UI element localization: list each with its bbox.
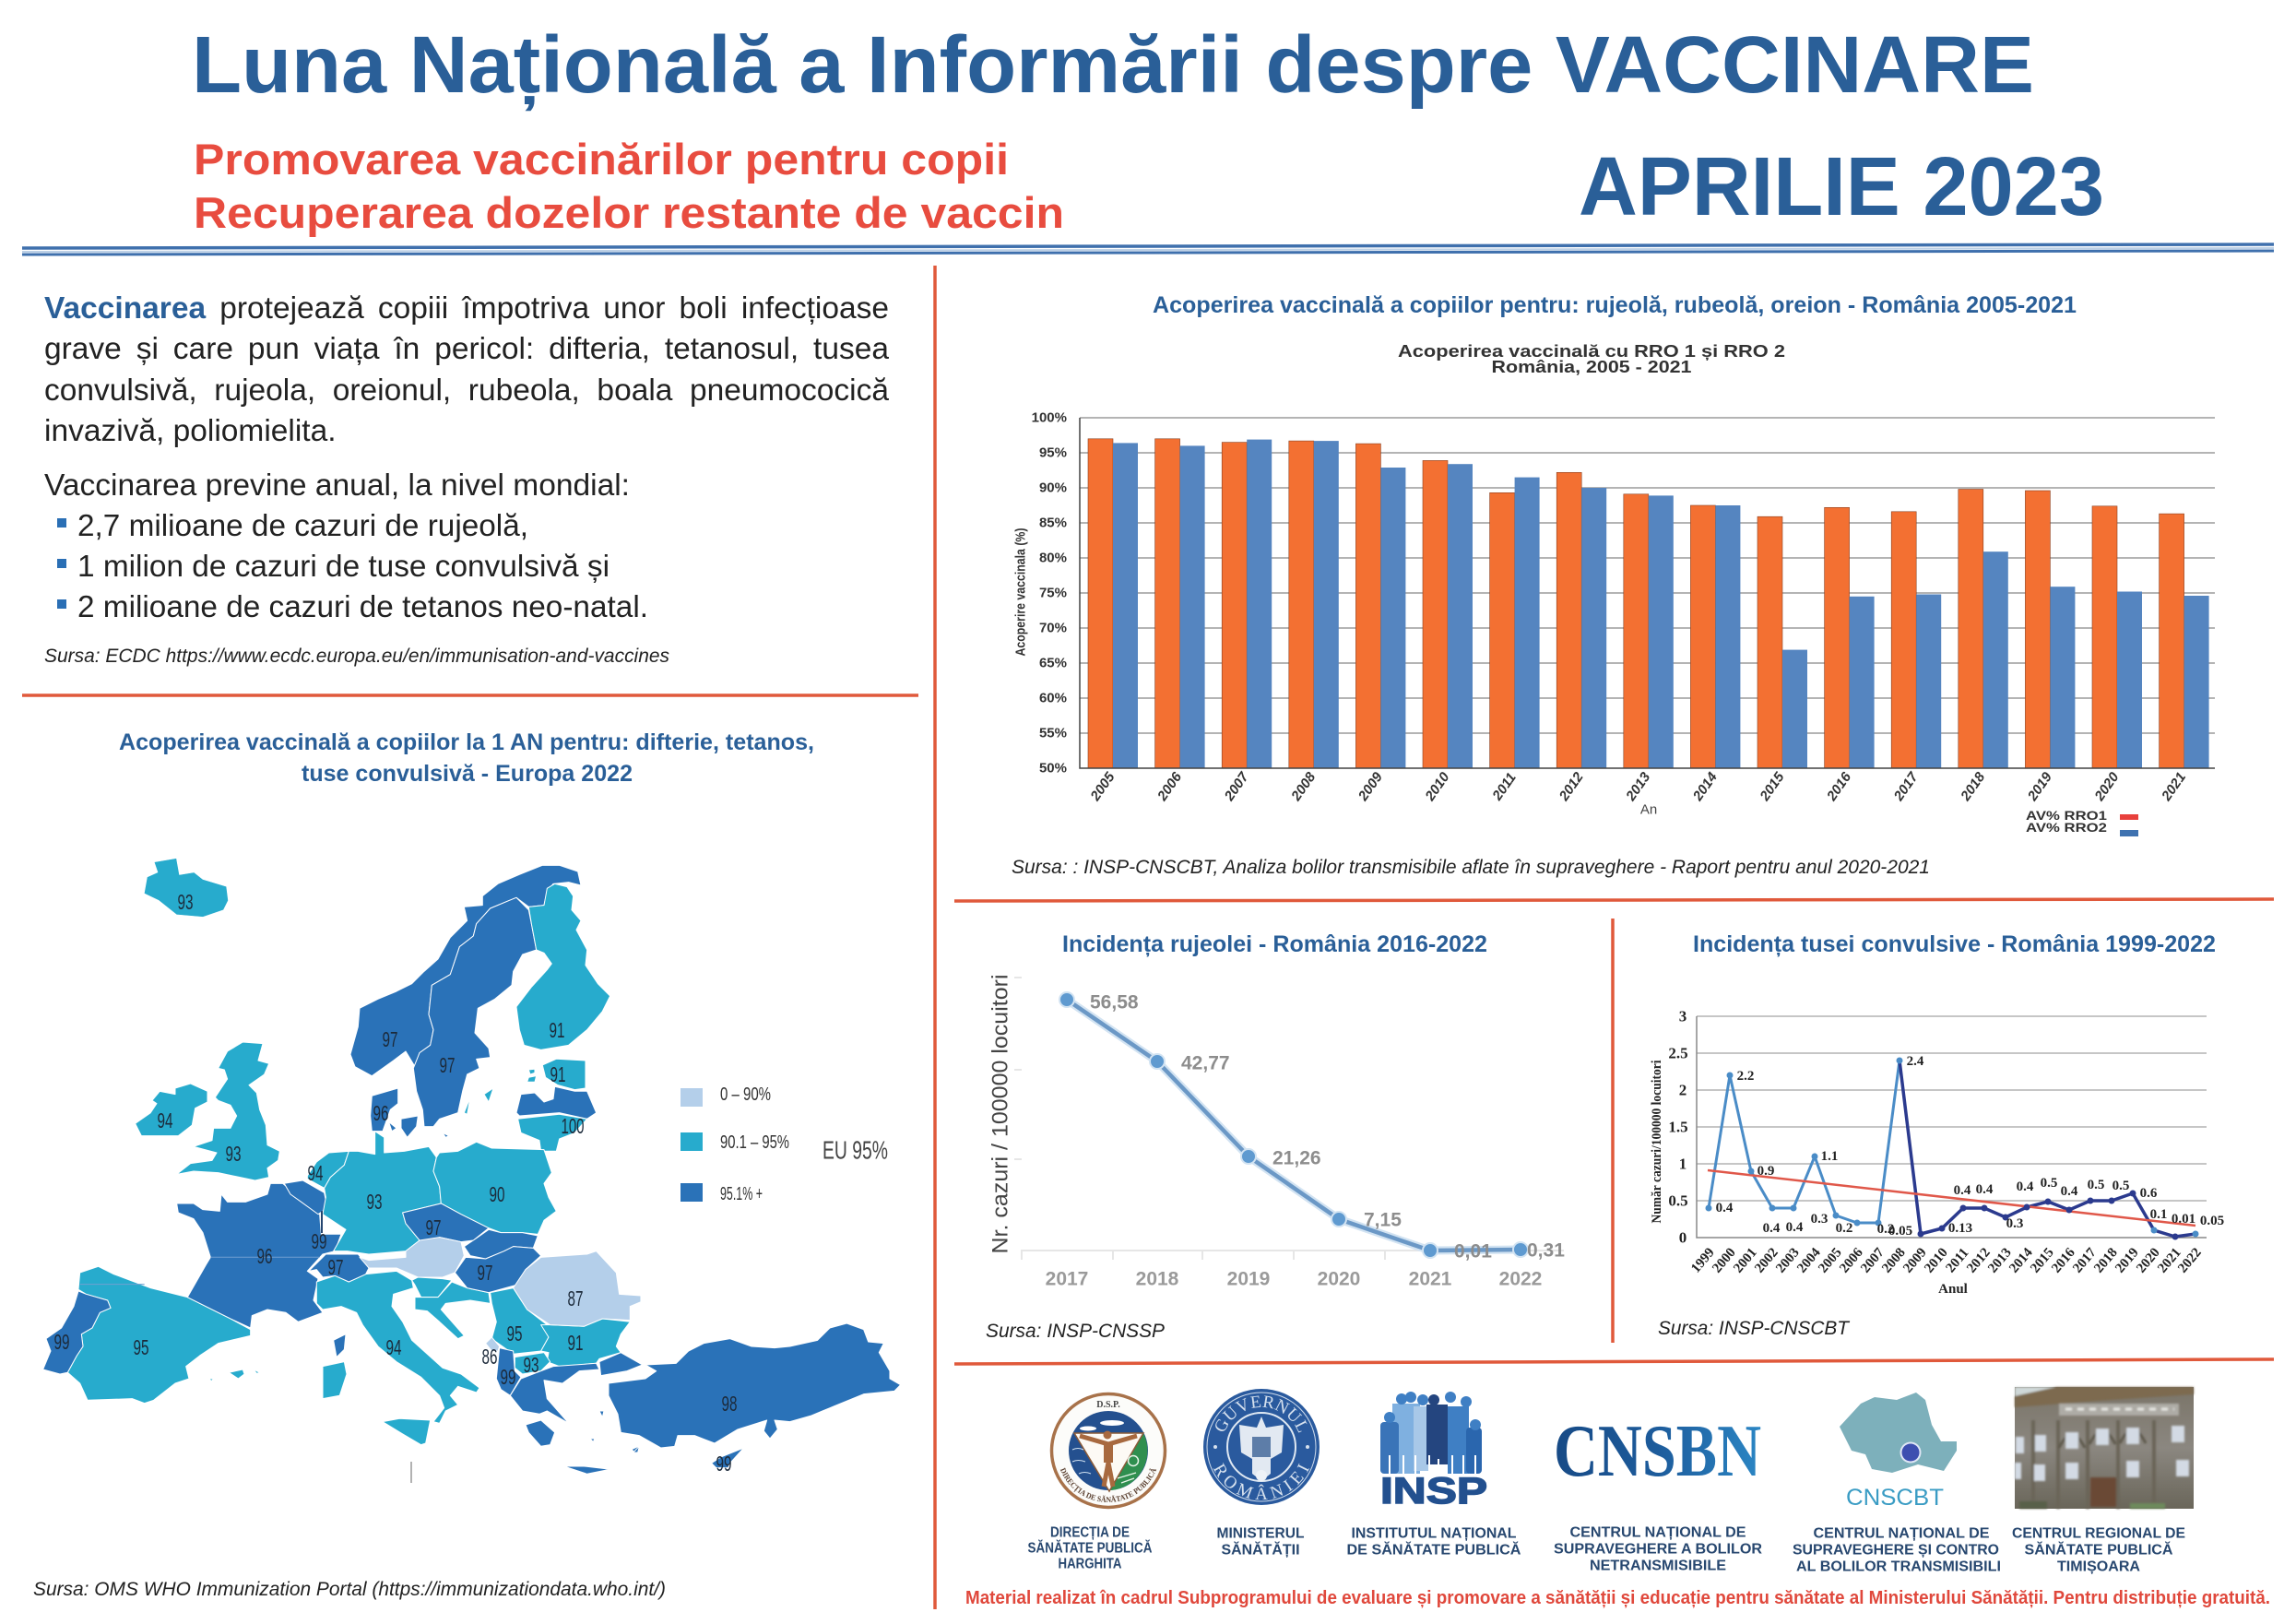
heading: Europe map	[119, 729, 814, 787]
data labels: 0.3	[2006, 1216, 2023, 1231]
caption: Ministerul Sănătății: MINISTERUL	[1217, 1525, 1305, 1542]
y axis labels: 95%	[1039, 445, 1067, 461]
heading: Europe map: tuse convulsivă - Europa 2022	[302, 761, 633, 787]
map values: 94	[308, 1161, 324, 1185]
title: Luna Națională a Informării despre VACCINARE	[192, 20, 2034, 111]
data labels: 0.5	[2113, 1179, 2129, 1193]
map values: 93	[524, 1353, 538, 1377]
source: measles chart: Sursa: INSP-CNSSP	[986, 1321, 1165, 1342]
data labels: 0.4	[2017, 1179, 2034, 1194]
y axis labels: 55%	[1039, 725, 1067, 741]
data labels: 0.2	[1877, 1222, 1894, 1237]
x axis labels: 2011	[1489, 770, 1520, 804]
data labels: 2.4	[1907, 1054, 1924, 1069]
axis labels: 1	[1679, 1155, 1686, 1173]
logo: CNSCBT	[1840, 1393, 1957, 1511]
map values: 96	[256, 1244, 273, 1268]
x axis years: 2016	[2049, 1245, 2078, 1276]
bar chart: RRO 1 and RRO 2 coverage: An	[1640, 802, 1657, 817]
data labels	[1716, 1054, 2224, 1239]
data points	[1059, 992, 1528, 1258]
logo: CNSBN: CNSBN	[1554, 1411, 1761, 1492]
years: 2022	[1499, 1269, 1542, 1289]
x axis years: 2018	[2091, 1245, 2121, 1276]
text block: prevented cases: 1 milion de cazuri de tuse convulsivă și	[77, 549, 610, 583]
axis labels	[1650, 1007, 1968, 1297]
map values: 97	[478, 1261, 492, 1285]
y axis title: Nr. cazuri / 100000 locuitori	[988, 974, 1012, 1254]
logo: Guvernul României: GUVERNUL	[1215, 1395, 1308, 1433]
x axis labels: 2006	[1154, 769, 1186, 804]
x axis labels: 2018	[1958, 769, 1989, 804]
x axis labels: 2019	[2024, 769, 2055, 804]
x axis labels: 2012	[1556, 769, 1587, 804]
data labels: 0.4	[1763, 1221, 1781, 1236]
text block: prevented cases: 2,7 milioane de cazuri de rujeolă,	[77, 508, 528, 542]
bar chart legend: AV% RRO2	[2026, 820, 2107, 835]
x axis years: 2006	[1837, 1245, 1866, 1276]
map values: 99	[500, 1365, 516, 1389]
orange bars: RRO1	[1088, 439, 2184, 768]
data labels: 0.05	[1888, 1224, 1912, 1239]
data labels: 0.6	[2140, 1186, 2158, 1201]
map values: 100	[561, 1114, 585, 1138]
logo: CNSCBT: CNSCBT	[1846, 1485, 1944, 1511]
logo: INSP	[1380, 1392, 1487, 1511]
x axis years: 2000	[1710, 1245, 1739, 1276]
y axis labels: 90%	[1039, 480, 1067, 496]
subtitle lines: Recuperarea dozelor restante de vaccin	[194, 188, 1064, 237]
source: pertussis chart: Sursa: INSP-CNSCBT	[1658, 1318, 1851, 1339]
text block: intro paragraph: convulsivă, rujeola, oreionul, rubeola, boala pneumococică	[44, 373, 889, 408]
x axis years: 2010	[1922, 1245, 1951, 1276]
map values: 97	[439, 1053, 456, 1077]
map legend: 0 – 90%	[720, 1085, 771, 1105]
years	[1046, 1269, 1542, 1289]
logo: INSP: INSP	[1380, 1471, 1487, 1511]
map values: 91	[568, 1331, 583, 1355]
map values: 95	[507, 1322, 522, 1345]
caption: CNSBN	[1554, 1525, 1762, 1573]
data labels: 0.2	[1836, 1221, 1852, 1236]
chart inner title: România, 2005 - 2021	[1492, 358, 1691, 376]
text block: prevented cases: 2 milioane de cazuri de tetanos neo-natal.	[77, 589, 648, 623]
map legend: EU 95%	[823, 1136, 888, 1164]
source: coverage chart: Sursa: : INSP-CNSCBT, Analiza bolilor transmisibile aflate în supraveghere - Raport pentru anul 2020-2021	[1012, 857, 1930, 878]
x axis labels: 2008	[1288, 769, 1320, 804]
y axis labels: 80%	[1039, 550, 1067, 566]
caption: Ministerul Sănătății: SĂNĂTĂȚII	[1221, 1540, 1300, 1559]
x axis years	[1688, 1245, 2205, 1276]
source: ECDC: Sursa: ECDC https://www.ecdc.europa.eu/en/immunisation-and-vaccines	[44, 646, 669, 667]
data labels: 0.01	[2172, 1212, 2195, 1227]
data labels: 0.4	[1716, 1201, 1734, 1215]
x axis years: 2022	[2175, 1245, 2205, 1276]
x axis years: 2015	[2028, 1245, 2057, 1276]
markers	[1706, 1057, 2198, 1239]
text block: intro paragraph	[44, 291, 889, 448]
map values: 97	[382, 1027, 398, 1051]
x axis years: 2009	[1900, 1245, 1930, 1276]
y axis labels: 50%	[1039, 760, 1067, 776]
x axis labels: 2020	[2091, 769, 2123, 804]
caption: INSP: INSTITUTUL NAȚIONAL	[1352, 1525, 1517, 1542]
data labels: 2.2	[1737, 1069, 1754, 1084]
data labels: 0.05	[2200, 1214, 2224, 1228]
map values: 97	[426, 1215, 441, 1239]
data labels: 0.5	[2041, 1176, 2057, 1191]
data labels: 0.4	[1976, 1182, 1994, 1197]
y axis labels	[1032, 409, 1067, 776]
x axis years: 2014	[2006, 1245, 2036, 1276]
x axis labels: 2010	[1422, 769, 1453, 804]
map legend	[681, 1085, 888, 1204]
x axis years: 2017	[2070, 1245, 2100, 1276]
text block: prevented cases	[44, 468, 648, 623]
caption: DSP: HARGHITA	[1059, 1557, 1122, 1571]
caption: INSP	[1346, 1525, 1521, 1559]
map values: 97	[328, 1255, 343, 1279]
y axis labels: 85%	[1039, 515, 1067, 531]
caption: CNSBN: NETRANSMISIBILE	[1590, 1559, 1726, 1573]
x axis years: 2021	[2155, 1245, 2184, 1276]
years: 2017	[1046, 1269, 1088, 1289]
x axis years: 2005	[1816, 1245, 1845, 1276]
caption: Timișoara: CENTRUL REGIONAL DE	[2012, 1525, 2185, 1542]
y axis labels: 60%	[1039, 690, 1067, 706]
axis labels: Anul	[1938, 1282, 1968, 1297]
x axis labels: 2016	[1823, 769, 1855, 804]
years: 2019	[1227, 1269, 1270, 1289]
y axis labels: 75%	[1039, 585, 1067, 601]
logo: Guvernul României: ROMÂNIEI	[1213, 1463, 1309, 1500]
map values: 96	[373, 1101, 389, 1125]
date heading: APRILIE 2023	[1579, 141, 2104, 233]
y axis labels: 100%	[1032, 409, 1067, 426]
Iceland	[144, 859, 229, 917]
subtitle lines: Promovarea vaccinărilor pentru copii	[194, 135, 1009, 184]
bar chart legend	[2026, 808, 2138, 836]
x axis years: 2011	[1943, 1246, 1972, 1275]
x axis labels: 2007	[1221, 769, 1252, 804]
map values	[53, 890, 738, 1476]
x axis labels: 2017	[1890, 769, 1922, 804]
text block: intro paragraph: Vaccinarea protejează copiii împotriva unor boli infecțioase	[44, 291, 889, 326]
x axis labels: 2015	[1757, 769, 1788, 804]
caption: CNSBN: SUPRAVEGHERE A BOLILOR	[1554, 1542, 1762, 1557]
map legend: 90.1 – 95%	[720, 1132, 789, 1153]
axis labels: 2.5	[1668, 1044, 1688, 1062]
caption: Timișoara: TIMIȘOARA	[2057, 1559, 2140, 1575]
heading: Europe map: Acoperirea vaccinală a copiilor la 1 AN pentru: difterie, tetanos,	[119, 729, 814, 755]
photo: Timișoara building	[2015, 1387, 2194, 1509]
x axis labels	[1087, 769, 2189, 804]
axis labels: 2	[1679, 1081, 1686, 1099]
map values: 91	[550, 1018, 564, 1042]
data labels: 0.3	[1811, 1212, 1828, 1227]
data labels: 1.1	[1821, 1149, 1838, 1164]
x axis years: 2020	[2134, 1245, 2163, 1276]
x axis years: 2008	[1879, 1245, 1909, 1276]
data labels: 0.4	[1954, 1183, 1971, 1198]
years: 2018	[1136, 1269, 1179, 1289]
logo: DSP Harghita	[1049, 1393, 1167, 1509]
data labels: 42,77	[1181, 1053, 1230, 1073]
caption: DSP: DIRECȚIA DE	[1050, 1525, 1130, 1540]
x axis years: 2001	[1731, 1245, 1760, 1276]
caption: DSP	[1027, 1525, 1153, 1571]
map values: 91	[550, 1062, 566, 1086]
caption: Timișoara: SĂNĂTATE PUBLICĂ	[2025, 1540, 2173, 1559]
caption: INSP: DE SĂNĂTATE PUBLICĂ	[1346, 1540, 1521, 1559]
y axis labels: 70%	[1039, 620, 1067, 636]
caption: CNSCBT: CENTRUL NAȚIONAL DE	[1813, 1525, 1990, 1542]
map values: 93	[225, 1142, 242, 1166]
x axis years: 2004	[1794, 1245, 1824, 1276]
axis labels: Număr cazuri/100000 locuitori	[1650, 1061, 1664, 1223]
map legend: 95.1% +	[720, 1184, 763, 1204]
data labels: 0.5	[2088, 1178, 2104, 1192]
data labels: 21,26	[1272, 1147, 1321, 1169]
map values: 94	[385, 1335, 402, 1359]
map values: 93	[177, 890, 194, 914]
logo: DSP Harghita: DIRECȚIA DE SĂNĂTATE PUBLICĂ	[1060, 1467, 1156, 1502]
caption: DSP: SĂNĂTATE PUBLICĂ	[1027, 1538, 1153, 1557]
data labels: 56,58	[1090, 992, 1139, 1013]
x axis labels: 2013	[1623, 769, 1654, 804]
years: 2020	[1318, 1269, 1360, 1289]
data labels: 0,01	[1454, 1241, 1492, 1262]
map values: 95	[133, 1335, 149, 1359]
x axis years: 1999	[1688, 1245, 1718, 1276]
text block: intro paragraph: invazivă, poliomielita.	[44, 414, 337, 448]
caption: CNSCBT	[1793, 1525, 2001, 1575]
caption: CNSCBT: AL BOLILOR TRANSMISIBILI	[1796, 1559, 2001, 1575]
axis labels: 0	[1679, 1228, 1686, 1247]
data labels: 7,15	[1364, 1210, 1402, 1230]
data labels: 0.9	[1758, 1164, 1774, 1179]
data labels: 0.1	[2150, 1207, 2167, 1222]
x axis years: 2019	[2113, 1245, 2142, 1276]
x axis years: 2013	[1985, 1245, 2015, 1276]
data labels	[1090, 992, 1565, 1262]
blue bars: RRO2	[1113, 440, 2209, 768]
heading: pertussis chart: Incidența tusei convulsive - România 1999-2022	[1693, 931, 2216, 957]
chart inner title: Acoperirea vaccinală cu RRO 1 și RRO 2	[1398, 342, 1785, 361]
map values: 99	[312, 1229, 326, 1253]
x axis labels: 2009	[1355, 769, 1386, 804]
map values: 94	[157, 1108, 173, 1132]
x axis years: 2002	[1752, 1245, 1781, 1276]
data labels: 0.13	[1948, 1221, 1972, 1236]
map values: 90	[489, 1182, 505, 1206]
heading: coverage chart: Acoperirea vaccinală a copiilor pentru: rujeolă, rubeolă, oreion - România 2005-2021	[1153, 292, 2077, 318]
map values: 99	[716, 1452, 732, 1476]
x axis labels: 2005	[1087, 769, 1118, 804]
axis labels: 0.5	[1668, 1191, 1688, 1210]
caption: Ministerul Sănătății	[1217, 1525, 1305, 1559]
data labels: 0.4	[1786, 1220, 1804, 1235]
caption: CNSCBT: SUPRAVEGHERE ȘI CONTRO	[1793, 1542, 1999, 1559]
x axis labels: 2021	[2158, 769, 2189, 804]
map values: 98	[721, 1392, 738, 1416]
source: WHO: Sursa: OMS WHO Immunization Portal (https://immunizationdata.who.int/)	[33, 1579, 666, 1600]
map values: 99	[53, 1330, 70, 1354]
logo: Guvernul României	[1203, 1389, 1320, 1505]
chart inner title	[1398, 342, 1785, 376]
data labels: 0,31	[1527, 1239, 1565, 1262]
axis labels: 3	[1679, 1007, 1686, 1025]
text block: intro paragraph: grave și care pun viața în pericol: difteria, tetanosul, tusea	[44, 332, 889, 366]
bar chart legend: AV% RRO1	[2026, 808, 2107, 823]
y axis labels: 65%	[1039, 655, 1067, 671]
caption: CNSBN: CENTRUL NAȚIONAL DE	[1569, 1525, 1746, 1540]
x axis years: 2003	[1773, 1245, 1803, 1276]
line chart: pertussis incidence	[1650, 1007, 2224, 1297]
data labels: 0.4	[2061, 1184, 2078, 1199]
logo: DSP Harghita: D.S.P.	[1096, 1400, 1120, 1410]
x axis years: 2007	[1858, 1245, 1888, 1276]
map values: 93	[367, 1190, 382, 1214]
map values: 86	[481, 1345, 498, 1369]
text block: prevented cases: Vaccinarea previne anual, la nivel mondial:	[44, 468, 630, 502]
map: Europe vaccination coverage	[43, 859, 901, 1483]
x axis labels: 2014	[1689, 769, 1721, 804]
years: 2021	[1409, 1269, 1452, 1289]
map values: 87	[568, 1286, 583, 1310]
axis labels: 1.5	[1668, 1118, 1688, 1136]
line chart: measles incidence	[988, 974, 1565, 1289]
trend line	[1708, 1170, 2195, 1226]
bar chart: RRO 1 and RRO 2 coverage	[1012, 342, 2215, 836]
y axis title: Acoperire vaccinala (%)	[1012, 528, 1029, 657]
subtitle lines	[194, 135, 1064, 237]
x axis years: 2012	[1964, 1245, 1994, 1276]
heading: measles chart: Incidența rujeolei - România 2016-2022	[1062, 931, 1487, 957]
caption: Timișoara	[2012, 1525, 2185, 1575]
